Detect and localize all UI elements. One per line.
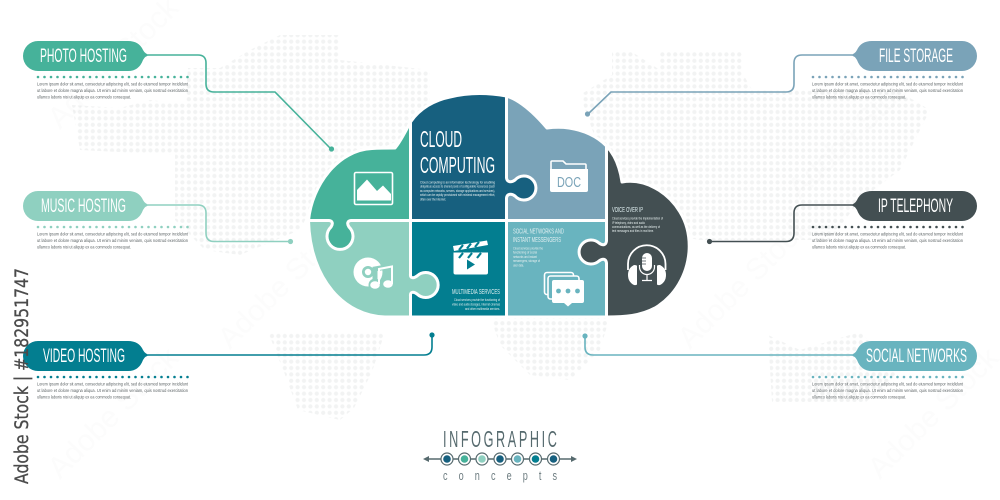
logo: infographic concepts [423,426,577,483]
logo: infographic concepts: concepts [443,470,557,483]
icon: DOC folder [550,161,588,192]
watermark: Adobe Stock [782,61,926,205]
callout: IP telephony [707,191,977,250]
text: voice over IP [612,205,663,233]
text: multimedia services: video and audio storages, Internet cinemas [452,302,500,306]
puzzle piece: music hosting [308,220,438,317]
watermark: Adobe Stock [212,211,356,355]
callout: music hosting: Lorem ipsum dolor sit amet, consectetur adipiscing elit, sed do eiusmod tempor incididunt [37,232,189,236]
icon: disc and music notes [354,258,393,292]
text: cloud computing description: Cloud computing is an information technology for enabling [420,180,495,184]
text: social networks and instant messengers: functioning of social [513,251,537,255]
text: multimedia services: and other multimedia services. [465,307,500,311]
cloud puzzle diagram [308,94,689,317]
callout: IP telephony: Lorem ipsum dolor sit amet, consectetur adipiscing elit, sed do eiusmod tempor incididunt [812,232,964,236]
callout: video hosting [23,332,435,400]
text: social networks and instant messengers: networks and instant [513,255,537,259]
heading: cloud computing: CLOUD [420,126,462,152]
callout: social networks: Lorem ipsum dolor sit amet, consectetur adipiscing elit, sed do eiusmod tempor incididunt [812,382,964,386]
icon: picture frame [354,172,392,204]
puzzle piece: multimedia services [410,220,506,317]
callout: video hosting: VIDEO HOSTING [43,346,125,367]
logo: infographic concepts: INFOGRAPHIC [443,426,557,452]
text: social networks and instant messengers: Cloud services provide the [513,246,543,250]
puzzle piece: photo hosting [308,122,410,249]
callout: file storage: ut labore et dolore magna aliqua. Ut enim ad minim veniam, quis nostrud exercitation [812,88,964,93]
watermark: Adobe Stock [672,211,816,355]
callout: music hosting [23,191,293,250]
callout: music hosting: MUSIC HOSTING [41,196,126,217]
text: multimedia services: MULTIMEDIA SERVICES [452,287,500,296]
callout: photo hosting: ut labore et dolore magna aliqua. Ut enim ad minim veniam, quis nostrud exercitation [37,88,189,93]
icon: chat messages [544,272,584,306]
callout: IP telephony: ut labore et dolore magna aliqua. Ut enim ad minim veniam, quis nostrud exercitation [812,238,964,243]
text: voice over IP: communications, as well as the delivery of [612,225,660,229]
icon: clapperboard [453,240,488,274]
callout: video hosting: ullamco laboris nisi ut aliquip ex ea commodo consequat. [37,394,131,400]
callout: photo hosting: PHOTO HOSTING [40,46,127,67]
text: social networks and instant messengers [513,226,564,267]
text: cloud computing description: which can be rapidly provisioned with minimal management effort, [420,193,495,197]
callout: file storage [585,41,977,117]
heading: cloud computing: COMPUTING [420,152,495,178]
text: voice over IP: IP telephony, video and audio [612,221,645,225]
puzzle piece: social networks [506,220,606,317]
puzzle piece: voice over IP [579,146,689,317]
callout: photo hosting: ullamco laboris nisi ut aliquip ex ea commodo consequat. [37,94,131,100]
callout: social networks: ullamco laboris nisi ut aliquip ex ea commodo consequat. [812,394,906,400]
text: multimedia services [452,287,500,311]
text: voice over IP: Cloud services provide the implementation of [612,217,663,221]
icon: headphones and microphone [628,245,666,285]
text: social networks and instant messengers: SOCIAL NETWORKS AND [513,226,564,236]
callout: IP telephony: ullamco laboris nisi ut aliquip ex ea commodo consequat. [812,244,906,250]
callout: music hosting: ut labore et dolore magna aliqua. Ut enim ad minim veniam, quis nostrud exercitation [37,238,189,243]
text: social networks and instant messengers: INSTANT MESSENGERS [513,235,561,244]
callout: social networks: ut labore et dolore magna aliqua. Ut enim ad minim veniam, quis nostrud exercitation [812,388,964,393]
puzzle piece: cloud computing [410,94,536,220]
callout: photo hosting [23,41,334,152]
callout: photo hosting: Lorem ipsum dolor sit amet, consectetur adipiscing elit, sed do eiusmod tempor incididunt [37,82,189,86]
text: cloud computing description: ubiquitous access to shared pools of configurable resources (such [420,185,495,189]
text: voice over IP: VOICE OVER IP [612,205,643,214]
text: voice over IP: text messages and files in real time. [612,229,654,233]
heading: cloud computing [420,126,495,178]
callout: file storage: ullamco laboris nisi ut aliquip ex ea commodo consequat. [812,94,906,100]
text: cloud computing description: as computer networks, servers, storage applications and services), [420,189,495,193]
puzzle piece: file storage [506,96,606,220]
text: social networks and instant messengers: user data. [513,263,524,267]
watermark: Adobe Stock [42,341,186,485]
text: cloud computing description: often over the Internet. [420,198,446,202]
callout: music hosting: ullamco laboris nisi ut aliquip ex ea commodo consequat. [37,244,131,250]
background: dotted world map [72,35,930,420]
text: cloud computing description [420,180,495,202]
text: multimedia services: Cloud services provide the functioning of [454,298,500,302]
callout: social networks [582,333,977,400]
callout: video hosting: Lorem ipsum dolor sit amet, consectetur adipiscing elit, sed do eiusmod tempor incididunt [37,382,189,386]
text: social networks and instant messengers: messengers, storage of [513,259,540,263]
callout: file storage: Lorem ipsum dolor sit amet, consectetur adipiscing elit, sed do eiusmod tempor incididunt [812,82,964,86]
icon: DOC folder: DOC [557,174,581,191]
stock credit: Adobe Stock | #182951747 [12,268,33,484]
callout: video hosting: ut labore et dolore magna aliqua. Ut enim ad minim veniam, quis nostrud exercitation [37,388,189,393]
